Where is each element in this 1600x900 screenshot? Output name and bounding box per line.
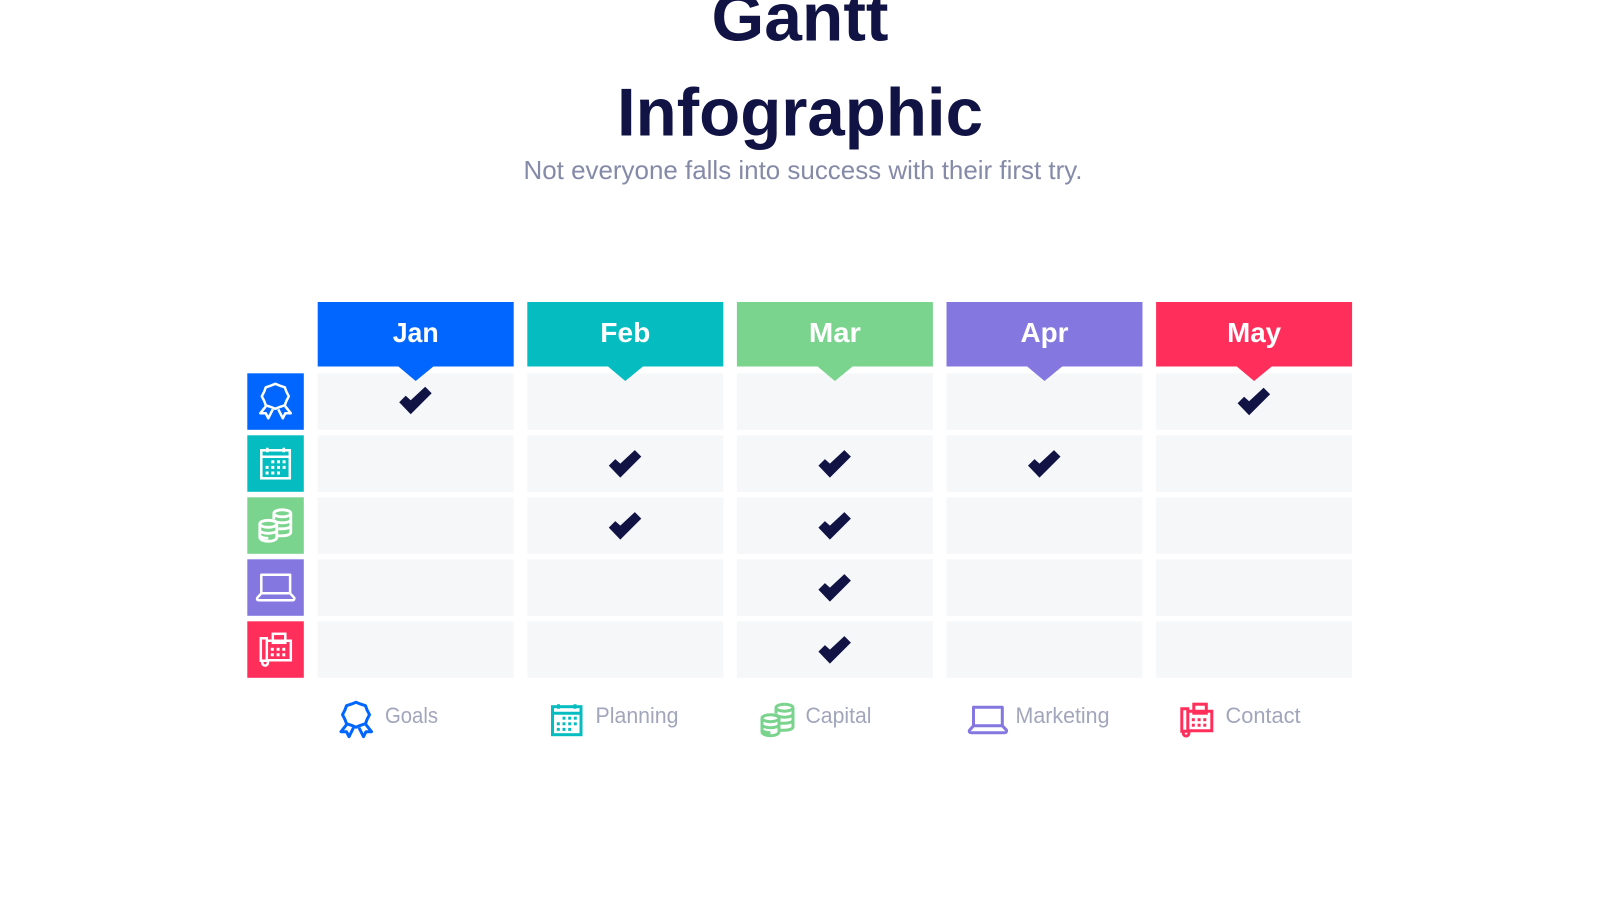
legend: contact	[1182, 703, 1300, 736]
row icon: goals	[247, 373, 304, 430]
subtitle: Not everyone falls into success with their first try.	[524, 155, 1082, 185]
month header: May	[1156, 302, 1352, 381]
title	[617, 0, 983, 150]
month header: May: May	[1227, 317, 1282, 348]
grid cells	[318, 373, 1352, 678]
row icon: marketing	[247, 559, 304, 616]
legend: goals: Goals	[385, 703, 438, 728]
month header: Mar	[737, 302, 933, 381]
legend: contact: Contact	[1226, 703, 1300, 728]
month header: Apr	[946, 302, 1142, 381]
legend: marketing	[969, 703, 1110, 733]
legend: planning	[552, 703, 678, 735]
row icon: contact	[247, 621, 304, 678]
month header: Mar: Mar	[809, 317, 861, 348]
title: Infographic	[617, 74, 983, 150]
legend: capital	[762, 703, 872, 736]
row icon: planning	[247, 435, 304, 492]
legend: goals	[341, 702, 438, 737]
check marks	[399, 387, 1270, 664]
legend: marketing: Marketing	[1016, 703, 1110, 728]
month header: Feb: Feb	[600, 317, 650, 348]
row icon: capital	[247, 497, 304, 554]
month header: Jan	[318, 302, 514, 381]
month header: Jan: Jan	[393, 317, 439, 348]
legend: capital: Capital	[806, 703, 872, 728]
legend: planning: Planning	[596, 703, 678, 728]
month header: Feb	[527, 302, 723, 381]
month header: Apr: Apr	[1020, 317, 1069, 348]
